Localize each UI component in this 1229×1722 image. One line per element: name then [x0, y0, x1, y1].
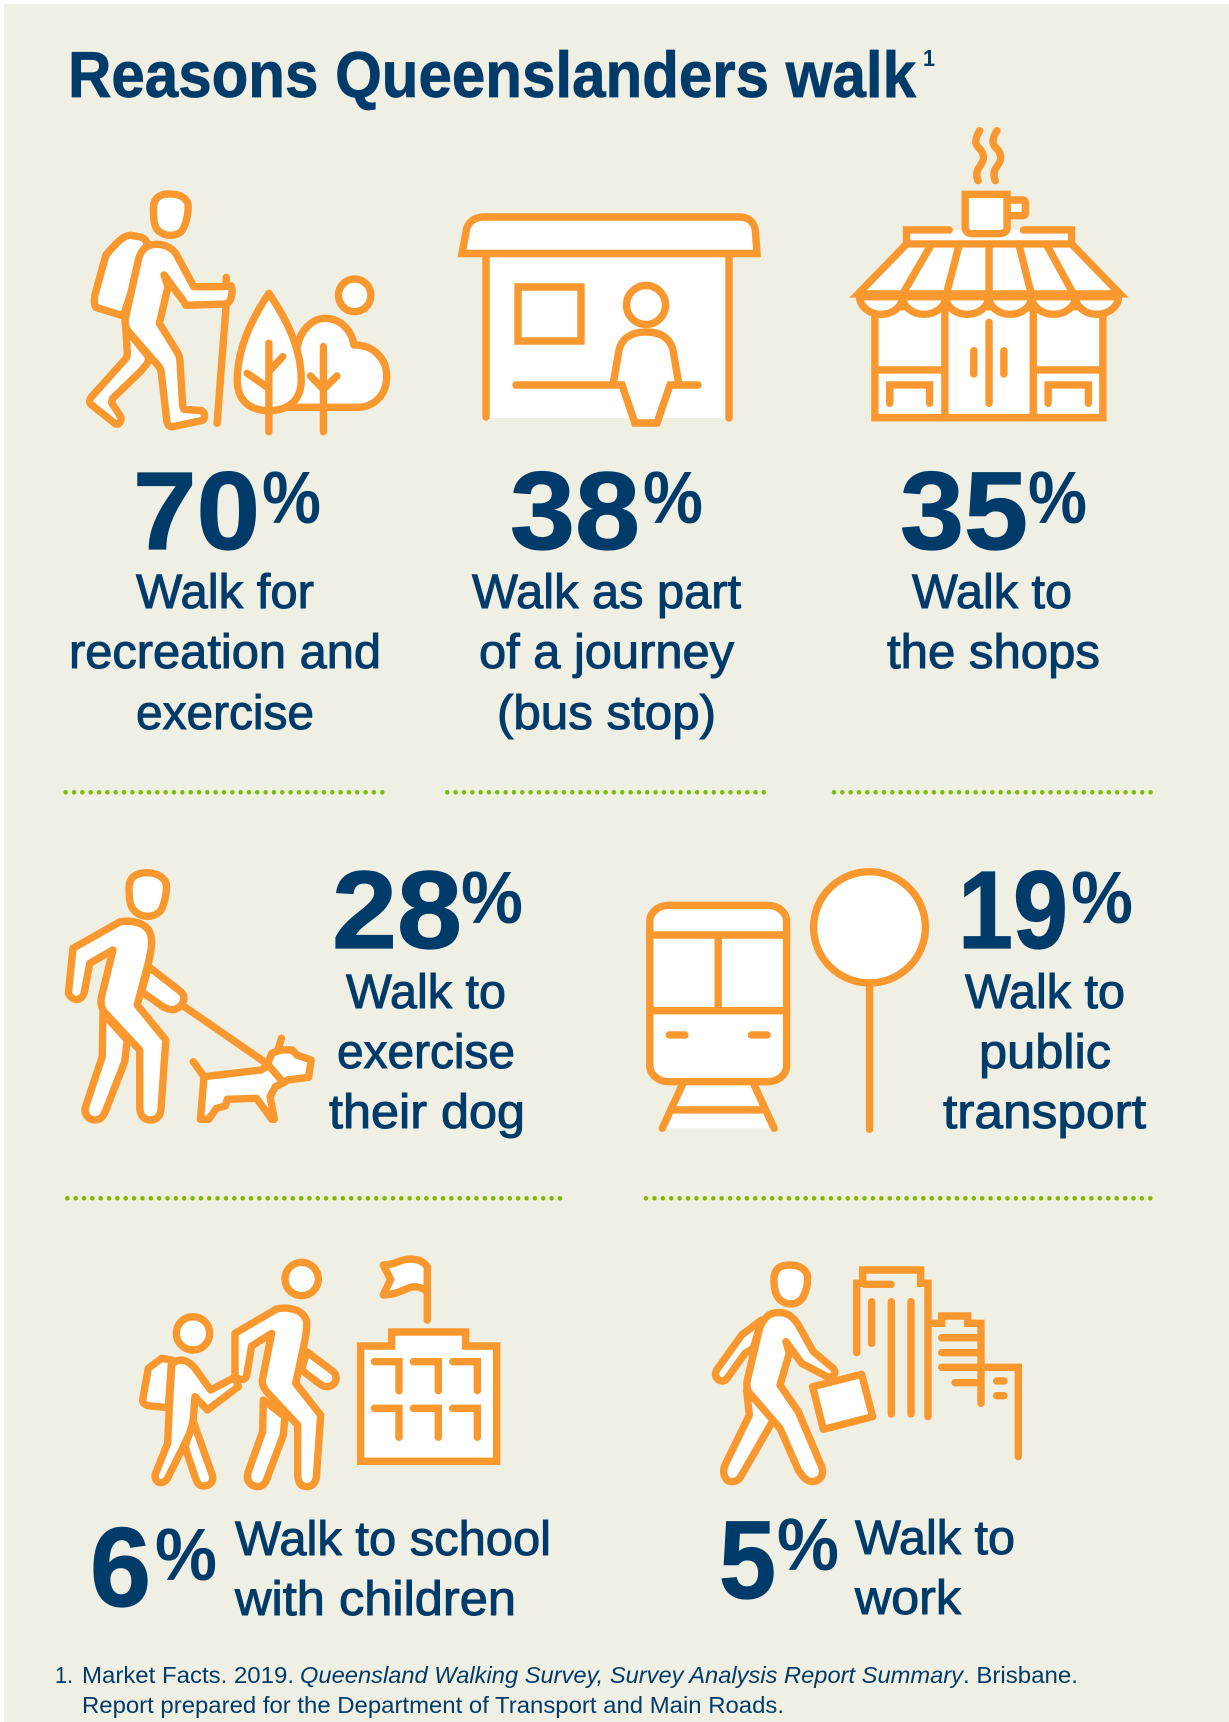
percent sign: %	[262, 456, 321, 539]
percent sign: %	[643, 456, 703, 539]
label: public transport: public	[979, 1026, 1111, 1079]
footnote: . Brisbane.	[963, 1662, 1078, 1688]
title: Reasons Queenslanders walk	[68, 38, 917, 111]
panel: the shops	[858, 131, 1120, 679]
panel: recreation and exercise	[69, 194, 387, 740]
value: 5 percent: 5	[719, 1499, 776, 1622]
label: part of a journey: Walk as part	[472, 566, 741, 619]
footnote: Report prepared for the Department of Transport and Main Roads.	[82, 1692, 784, 1718]
value: 28 percent: 28	[332, 849, 462, 972]
percent sign: %	[155, 1513, 217, 1596]
panel: exercise their dog	[68, 849, 525, 1139]
label: school with children	[234, 1513, 551, 1626]
percent sign: %	[1071, 856, 1133, 939]
footnote: Queensland Walking Survey, Survey Analysis Report Summary	[300, 1662, 965, 1688]
icon: hiker with trees	[90, 194, 387, 432]
label: public transport: Walk to	[965, 966, 1125, 1019]
label: the shops: Walk to	[912, 566, 1072, 619]
value: 70 percent: 70	[133, 450, 260, 573]
label: exercise their dog	[329, 966, 525, 1139]
label: recreation and exercise: Walk for	[136, 566, 314, 619]
panel: part of a journey	[462, 217, 757, 740]
panel: school with children	[90, 1259, 551, 1630]
label: work: work	[854, 1572, 962, 1625]
label: school with children: with children	[234, 1573, 516, 1626]
percent sign: %	[461, 856, 523, 939]
label: part of a journey: (bus stop)	[497, 687, 716, 740]
label: exercise their dog: Walk to	[346, 966, 506, 1019]
label: public transport	[943, 966, 1146, 1139]
percent sign: %	[777, 1503, 839, 1586]
icon: coffee shop	[858, 131, 1120, 418]
label: part of a journey: of a journey	[479, 626, 734, 679]
value: 35 percent: 35	[900, 450, 1028, 573]
label: exercise their dog: their dog	[329, 1086, 525, 1139]
label: work: Walk to	[855, 1512, 1015, 1565]
icon: train and stop sign	[650, 872, 925, 1129]
value: 19 percent: 19	[958, 849, 1068, 972]
panel: work	[716, 1265, 1018, 1625]
footnote: Market Facts. 2019.	[82, 1662, 294, 1688]
label: work	[854, 1512, 1015, 1625]
icon: adult and child walking to school	[143, 1259, 497, 1487]
value: 6 percent: 6	[90, 1505, 151, 1630]
label: recreation and exercise: exercise	[136, 687, 314, 740]
icon: person walking dog	[68, 873, 311, 1120]
label: school with children: Walk to school	[235, 1513, 551, 1566]
label: recreation and exercise: recreation and	[69, 626, 381, 679]
label: exercise their dog: exercise	[337, 1026, 515, 1079]
footnote: 1.	[55, 1662, 73, 1688]
value: 38 percent: 38	[510, 450, 640, 573]
icon: bus stop shelter	[462, 217, 757, 423]
label: part of a journey	[472, 566, 741, 740]
label: the shops: the shops	[887, 626, 1100, 679]
panel: public transport	[650, 849, 1146, 1139]
label: the shops	[887, 566, 1100, 679]
title footnote marker: 1	[923, 45, 935, 71]
icon: commuter and city buildings	[716, 1265, 1018, 1482]
label: recreation and exercise	[69, 566, 381, 740]
label: public transport: transport	[943, 1086, 1146, 1139]
footnote	[55, 1662, 1078, 1718]
percent sign: %	[1028, 456, 1087, 539]
